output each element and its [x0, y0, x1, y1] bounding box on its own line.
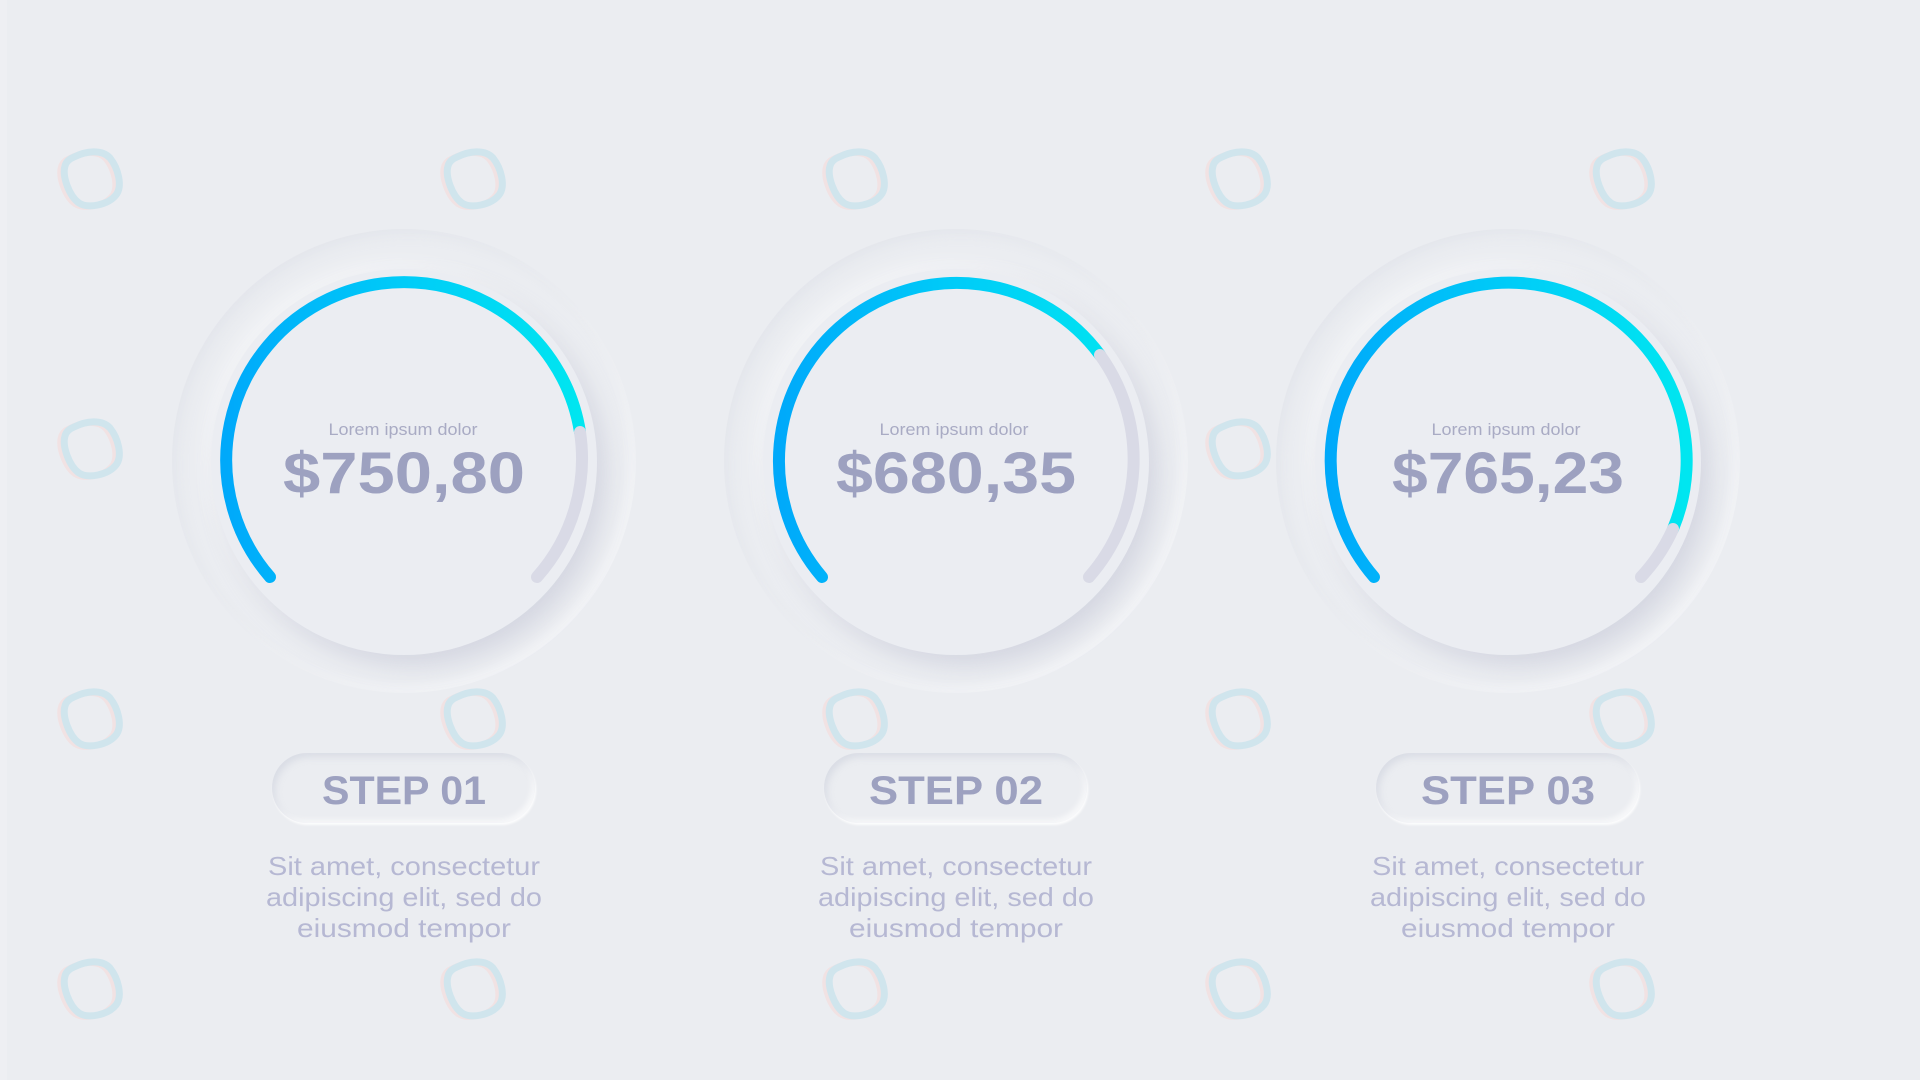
gauge: step 01 progress ring and value	[220, 276, 588, 583]
panel: step 01	[220, 276, 610, 943]
text: step 02 label and description: adipiscing elit, sed do	[818, 882, 1094, 912]
text: step 01 label and description	[266, 769, 542, 943]
gauge: step 03 progress ring and value	[1324, 276, 1693, 583]
gauge: step 02 progress ring and value: Lorem ipsum dolor	[880, 420, 1029, 439]
text: step 02 label and description: eiusmod tempor	[849, 913, 1063, 943]
panel: step 02	[772, 276, 1162, 943]
text: step 01 label and description: STEP 01	[322, 769, 486, 813]
text: step 01 label and description: Sit amet, consectetur	[268, 851, 540, 881]
text: step 01 label and description: adipiscing elit, sed do	[266, 882, 542, 912]
text: step 02 label and description	[818, 769, 1094, 943]
text: step 03 label and description	[1370, 769, 1646, 943]
gauge: step 02 progress ring and value: $680,35	[836, 441, 1076, 506]
badge: step 02	[824, 753, 1087, 823]
text: step 01 label and description: eiusmod tempor	[297, 913, 511, 943]
text: step 03 label and description: eiusmod tempor	[1401, 913, 1615, 943]
text: step 03 label and description: adipiscing elit, sed do	[1370, 882, 1646, 912]
gauge: step 01 progress ring and value: $750,80	[283, 441, 525, 506]
gauge: step 03 progress ring and value: $765,23	[1392, 441, 1624, 506]
gauge: step 02 progress ring and value	[772, 276, 1140, 583]
text: step 03 label and description: Sit amet, consectetur	[1372, 851, 1644, 881]
text: step 02 label and description: Sit amet, consectetur	[820, 851, 1092, 881]
text: step 02 label and description: STEP 02	[869, 769, 1043, 813]
panel: step 03	[1324, 276, 1714, 943]
gauge: step 01 progress ring and value: Lorem ipsum dolor	[328, 420, 478, 439]
gauge: step 03 progress ring and value: Lorem ipsum dolor	[1432, 420, 1581, 439]
text: step 03 label and description: STEP 03	[1421, 769, 1595, 813]
badge: step 03	[1376, 753, 1639, 823]
badge: step 01	[272, 753, 535, 823]
